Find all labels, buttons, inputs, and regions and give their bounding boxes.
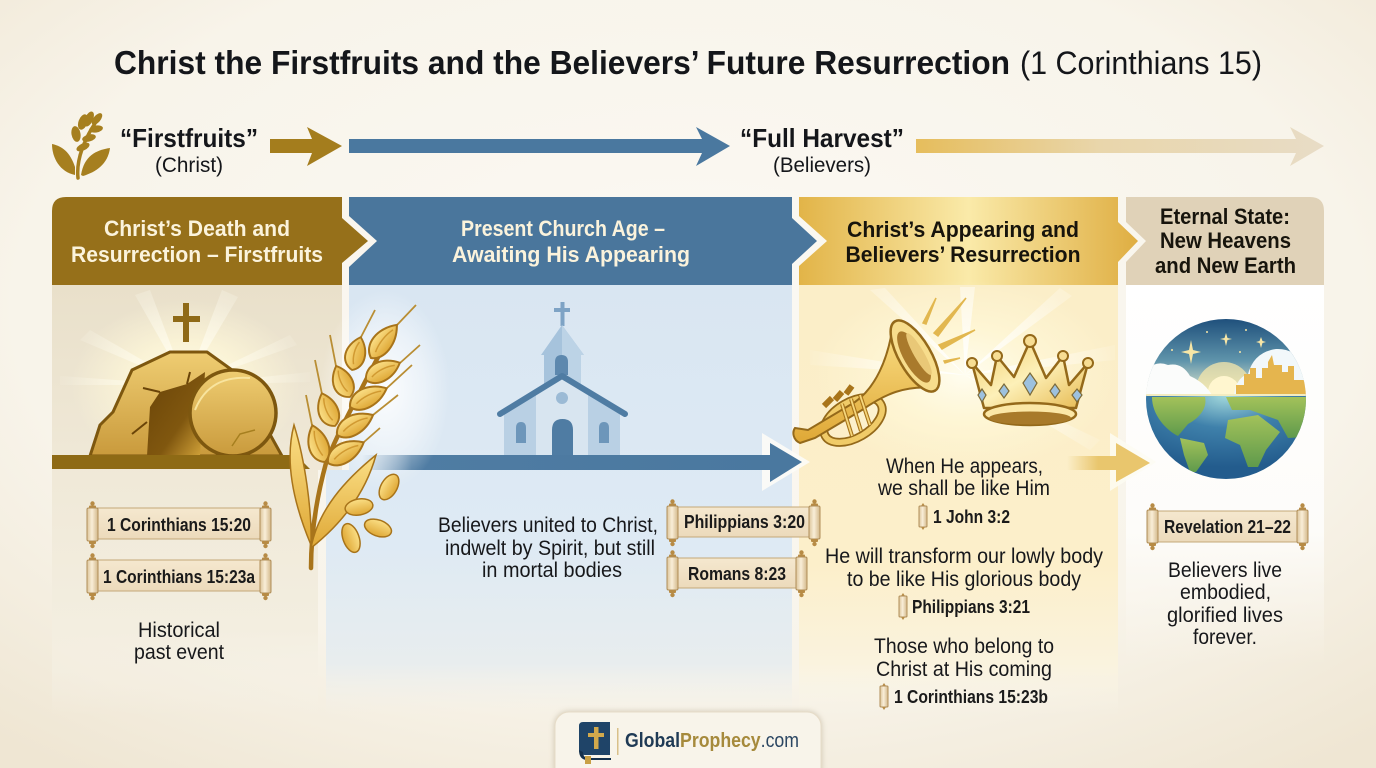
continents: [1152, 397, 1306, 472]
scroll: Philippians 3:20: Philippians 3:20: [684, 512, 805, 532]
icon: new earth globe: [1146, 319, 1306, 480]
header chevron: [52, 197, 368, 285]
verse: Philippians 3:21: [825, 545, 1103, 620]
sound lines: [923, 298, 975, 363]
label: Firstfruits: [120, 123, 258, 177]
icon: church: [500, 302, 625, 456]
text: historical past event: Historical: [138, 619, 220, 642]
text: believers live: glorified lives: [1167, 604, 1283, 627]
text: believers live: [1167, 559, 1283, 649]
panel: present church age: [326, 197, 817, 715]
icon: crown: [967, 335, 1093, 425]
icon: wheat sprig: [52, 110, 110, 178]
text: believers united: in mortal bodies: [482, 559, 622, 582]
panel body: [326, 285, 792, 715]
verse: 1 Corinthians 15:23b: [874, 635, 1054, 710]
label: Firstfruits: (Christ): [155, 154, 223, 177]
header text: Awaiting His Appearing: [452, 242, 690, 267]
text: believers united: Believers united to Christ,: [438, 514, 658, 537]
sky: [1146, 319, 1306, 395]
arrow: fading gold: [916, 127, 1324, 166]
grains: [363, 318, 404, 364]
text: historical past event: [134, 619, 224, 664]
awns: [306, 305, 420, 442]
light rays: [60, 290, 310, 470]
header text: [452, 216, 690, 267]
text: believers united: [438, 514, 658, 582]
text: believers live: Believers live: [1168, 559, 1282, 582]
verse: Philippians 3:21: to be like His glorious body: [847, 568, 1081, 591]
ocean: [1146, 395, 1306, 480]
verse: 1 John 3:2: we shall be like Him: [877, 477, 1050, 500]
panel body: [52, 285, 342, 715]
icon: wheat stalk: [290, 290, 450, 568]
header chevron: [349, 197, 817, 285]
verse: 1 Corinthians 15:23b: Those who belong to: [874, 635, 1054, 658]
valve loop: [816, 388, 890, 452]
scroll: Romans 8:23: [667, 550, 807, 597]
scroll: 1 Corinthians 15:23a: 1 Corinthians 15:23a: [103, 567, 256, 587]
header text: Resurrection – Firstfruits: [71, 242, 323, 267]
sun: [1198, 362, 1247, 394]
header text: [71, 216, 323, 267]
wordmark: GlobalProphecy.com: [625, 730, 799, 752]
header text: Eternal State:: [1160, 204, 1290, 229]
text: believers live: embodied,: [1180, 581, 1271, 604]
title: Christ the Firstfruits and the Believers’ Future Resurrection: [114, 44, 1010, 81]
arrow: to eternal state: [1067, 433, 1156, 491]
bell rim: [881, 313, 949, 399]
text: historical past event: past event: [134, 641, 224, 664]
panel: eternal state: [1126, 197, 1324, 665]
header: [1126, 197, 1324, 285]
tube and bell: [793, 325, 935, 443]
header text: Christ’s Appearing and: [847, 217, 1079, 242]
header text: [846, 217, 1080, 267]
verse: 1 John 3:2: 1 John 3:2: [933, 507, 1010, 527]
scroll: 1 Corinthians 15:20: [87, 501, 271, 548]
divider: [617, 728, 618, 755]
horizon: [1146, 394, 1306, 396]
panel body: [799, 285, 1118, 715]
verse: 1 Corinthians 15:23b: 1 Corinthians 15:23b: [894, 687, 1048, 707]
top progression band: [52, 110, 1324, 178]
clouds: [1146, 363, 1212, 395]
panel body: [1126, 285, 1324, 665]
label: Full Harvest: (Believers): [773, 154, 871, 177]
icon: trumpet: [793, 298, 975, 452]
city: [1236, 355, 1306, 395]
header text: Believers’ Resurrection: [846, 242, 1080, 267]
light glow: [810, 280, 1115, 470]
verse: Philippians 3:21: Philippians 3:21: [912, 597, 1030, 617]
text: believers united: indwelt by Spirit, but still: [445, 537, 655, 560]
stars: [1171, 329, 1266, 364]
verse: 1 Corinthians 15:23b: Christ at His coming: [876, 658, 1052, 681]
arrow: blue long: [349, 127, 730, 166]
scroll: 1 Corinthians 15:20: 1 Corinthians 15:20: [107, 515, 251, 535]
header text: Present Church Age –: [461, 216, 665, 241]
verse: Philippians 3:21: He will transform our lowly body: [825, 545, 1103, 568]
title: (1 Corinthians 15): [1020, 45, 1262, 81]
valves: [824, 386, 852, 406]
logo card: [555, 712, 821, 768]
label: Full Harvest: [740, 123, 904, 177]
stem: [311, 342, 386, 568]
scroll: Philippians 3:20: [667, 499, 820, 546]
timeline: gold: [52, 455, 310, 469]
header text: [1155, 204, 1296, 278]
label: Full Harvest: “Full Harvest”: [740, 123, 904, 153]
scroll: Revelation 21-22: Revelation 21–22: [1164, 517, 1291, 537]
arrow: gold short: [270, 127, 342, 166]
verse: 1 John 3:2: When He appears,: [886, 455, 1043, 478]
label: Firstfruits: “Firstfruits”: [120, 123, 258, 153]
leaves: [290, 425, 311, 545]
panel: Christ's death and resurrection: [52, 197, 368, 715]
header text: New Heavens: [1160, 228, 1291, 253]
icon: cross: [173, 303, 200, 342]
timeline: blue arrow: [362, 433, 810, 491]
header chevron: [799, 197, 1138, 285]
icon: empty tomb: [90, 352, 282, 456]
header text: Christ’s Death and: [104, 216, 290, 241]
verse: 1 John 3:2: [877, 455, 1050, 530]
panel: Christ's appearing: [799, 197, 1138, 715]
header text: and New Earth: [1155, 253, 1296, 278]
scroll: 1 Corinthians 15:23a: [87, 553, 271, 600]
icon: bible: [579, 722, 611, 764]
scroll: Romans 8:23: Romans 8:23: [688, 564, 786, 584]
scroll: Revelation 21-22: [1147, 503, 1308, 550]
loose seeds: [338, 471, 403, 555]
text: believers live: forever.: [1193, 626, 1257, 649]
